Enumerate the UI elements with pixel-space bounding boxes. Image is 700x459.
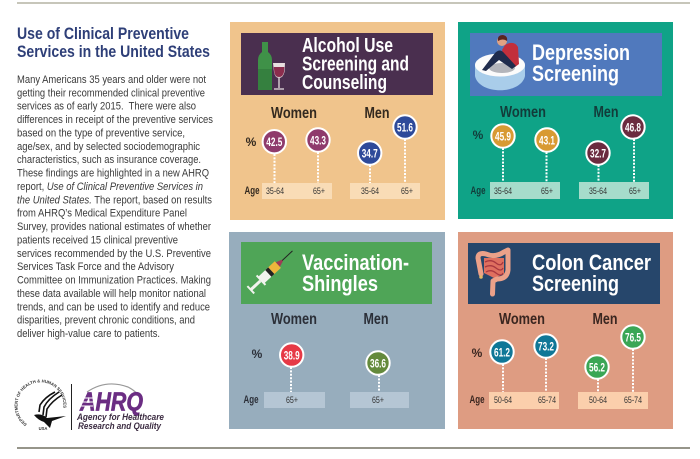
lollipop chart: 43.1 [539, 133, 555, 147]
panel: vaccination: % [252, 347, 263, 361]
lollipop chart: 46.8 [625, 120, 641, 134]
intro text block: report, Use of Clinical Preventive Services in [17, 181, 203, 193]
icon: person on disc [475, 35, 525, 90]
header: depression: Depression [532, 40, 630, 65]
panel: vaccination [229, 232, 445, 429]
logo: HHS seal: DEPARTMENT OF HEALTH & HUMAN SERVICES [14, 380, 66, 426]
lollipop chart: 51.6 [397, 120, 413, 134]
header: depression [470, 33, 662, 96]
intro text block: trends, and can be used to identify and reduce [17, 301, 210, 313]
intro text block [17, 74, 213, 340]
panel: colon cancer [458, 232, 673, 429]
panel: depression: % [473, 128, 484, 142]
age bars: Age [244, 394, 258, 406]
title [17, 25, 210, 61]
panel: alcohol use [230, 22, 445, 220]
panel: vaccination: Men [364, 311, 388, 328]
panel: colon cancer: % [472, 346, 483, 360]
intro text block: services as of early 2015. There were also [17, 101, 196, 113]
age bars [470, 182, 649, 199]
lollipop chart: 76.5 [625, 330, 641, 344]
panel: depression: Women [500, 104, 546, 121]
logo divider [70, 384, 72, 430]
intro text block: getting their recommended clinical preventive [17, 87, 205, 99]
intro text block: the United States. The report, based on results [17, 194, 212, 206]
age bars: 65+ [541, 186, 553, 196]
age bars: Age [470, 185, 486, 197]
title: Services in the United States [17, 43, 210, 61]
age bars: 35-64 [266, 186, 284, 196]
age bars: Age [244, 185, 260, 197]
lollipop chart: 32.7 [590, 146, 606, 160]
age bars: 35-64 [494, 186, 512, 196]
intro text block: disparities, prevent chronic conditions, and [17, 315, 195, 327]
age bars: 50-64 [494, 395, 512, 405]
age bars: 35-64 [589, 186, 607, 196]
intro text block: from AHRQ’s Medical Expenditure Panel [17, 208, 187, 220]
panel: colon cancer: Men [592, 311, 618, 328]
age bars: 65+ [286, 395, 298, 405]
header: vaccination: Vaccination- [302, 250, 409, 275]
header: colon cancer: Colon Cancer [532, 250, 651, 275]
intro text block: Services Task Force and the Advisory [17, 261, 174, 273]
lollipop chart: 34.7 [362, 146, 378, 160]
age bars: 65+ [313, 186, 325, 196]
age bars: 35-64 [361, 186, 379, 196]
intro text block: These findings are highlighted in a new AHRQ [17, 168, 209, 180]
header: alcohol use: Counseling [302, 72, 387, 94]
lollipop chart: 42.5 [266, 135, 283, 149]
intro text block: characteristics, such as insurance coverage. [17, 154, 201, 166]
lollipop chart: 45.9 [495, 129, 511, 143]
intro text block: these data available will help monitor national [17, 288, 206, 300]
age bars: Age [470, 394, 484, 406]
age bars: 65+ [401, 186, 413, 196]
lollipop chart: 73.2 [538, 339, 554, 353]
intro text block: differences in receipt of the preventive services [17, 114, 213, 126]
lollipop chart [263, 115, 417, 183]
lollipop chart [490, 325, 645, 392]
logo: AHRQ: AHRQ [79, 386, 143, 416]
logo: HHS seal: USA [39, 426, 47, 431]
icon: wine bottle and glass [258, 42, 285, 90]
age bars [244, 392, 409, 408]
intro text block: age/sex, and by selected sociodemographic [17, 141, 200, 153]
age bars [470, 392, 648, 409]
lollipop chart: 38.9 [284, 348, 300, 362]
intro text block: Committee on Immunization Practices. Making [17, 275, 211, 287]
panel: colon cancer: Women [499, 311, 545, 328]
intro text block: patients received 15 clinical preventive [17, 234, 178, 246]
lollipop chart [280, 343, 390, 392]
header: depression: Screening [532, 61, 619, 86]
intro text block: services recommended by the U.S. Preventive [17, 248, 211, 260]
lollipop chart [491, 115, 645, 182]
intro text block: Many Americans 35 years and older were not [17, 74, 206, 86]
lollipop chart: 56.2 [589, 360, 605, 374]
intro text block: deliver high-value care to patients. [17, 328, 160, 340]
icon: syringe [246, 246, 297, 295]
title: Use of Clinical Preventive [17, 25, 189, 43]
panel: alcohol use: Women [271, 105, 317, 122]
panel: alcohol use: % [246, 135, 257, 149]
lollipop chart: 36.6 [370, 356, 386, 370]
panel: alcohol use: Men [364, 105, 390, 122]
lollipop chart: 43.3 [310, 133, 326, 147]
intro text block: Survey, provides national estimates of whether [17, 221, 211, 233]
header: alcohol use [241, 33, 433, 95]
header: colon cancer [468, 243, 660, 304]
age bars: 65-74 [538, 395, 556, 405]
header: vaccination: Shingles [302, 271, 378, 296]
panel: vaccination: Women [271, 311, 317, 328]
age bars: 50-64 [589, 395, 607, 405]
header: vaccination [241, 242, 432, 304]
age bars: 65+ [629, 186, 641, 196]
header: alcohol use: Screening and [302, 54, 409, 76]
logo: AHRQ: Research and Quality [78, 421, 162, 431]
header: colon cancer: Screening [532, 271, 619, 296]
panel: depression [458, 22, 673, 219]
age bars: 65+ [372, 395, 384, 405]
age bars [244, 183, 420, 199]
intro text block: based on the type of preventive service, [17, 128, 185, 140]
logo: AHRQ: Agency for Healthcare [76, 412, 164, 422]
lollipop chart: 61.2 [494, 345, 510, 359]
panel: depression: Men [594, 104, 618, 121]
icon: intestine [478, 250, 508, 294]
logo: AHRQ [76, 384, 164, 431]
header: alcohol use: Alcohol Use [302, 35, 393, 57]
age bars: 65-74 [624, 395, 642, 405]
